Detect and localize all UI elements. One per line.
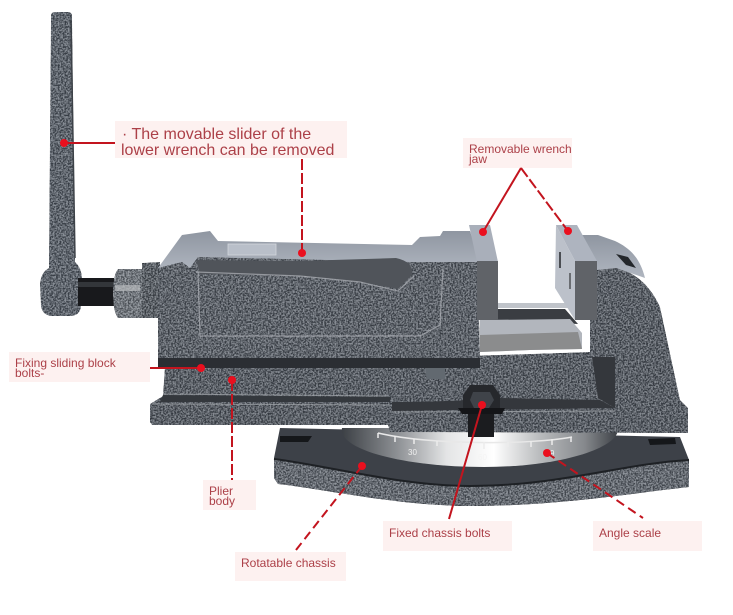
callout: removable wrench jaw: jaw <box>468 152 487 166</box>
callout: plier body: Plier <box>209 484 233 498</box>
callout: angle scale: Angle scale <box>599 526 661 540</box>
callout: rotatable chassis <box>235 462 366 581</box>
rotating vise product image <box>40 12 689 506</box>
callout: movable slider: lower wrench can be removed <box>121 142 334 159</box>
angle scale disc: 60 <box>478 453 487 462</box>
removable jaw, right <box>555 225 597 320</box>
handle wrench <box>40 12 160 318</box>
angle scale disc <box>342 428 618 467</box>
callout: fixed chassis bolts: Fixed chassis bolts <box>389 526 490 540</box>
callout: plier body: body <box>209 494 235 508</box>
callout: fixed chassis bolts <box>383 401 512 551</box>
angle scale disc: 30 <box>408 448 417 457</box>
slide rails behind jaws <box>480 303 582 352</box>
angle scale disc: 9 <box>550 449 555 458</box>
callout: movable slider: · The movable slider of the <box>122 126 311 143</box>
callout: angle scale <box>543 449 702 551</box>
removable jaw, left <box>469 225 498 320</box>
fixed chassis bolt <box>458 385 505 437</box>
callout: fixing sliding block bolts: bolts- <box>15 366 44 380</box>
callout: fixing sliding block bolts <box>9 352 205 382</box>
callout: movable slider <box>60 121 347 257</box>
callout: removable wrench jaw <box>463 138 572 236</box>
rotatable chassis <box>274 428 689 506</box>
callout: removable wrench jaw: Removable wrench <box>469 142 572 156</box>
lower body with base plate and column <box>150 268 688 433</box>
callout: rotatable chassis: Rotatable chassis <box>241 556 336 570</box>
right column top and support <box>577 235 645 278</box>
callout: fixing sliding block bolts: Fixing sliding block <box>15 356 117 370</box>
movable slider body <box>158 231 480 379</box>
callout: plier body <box>203 376 256 510</box>
